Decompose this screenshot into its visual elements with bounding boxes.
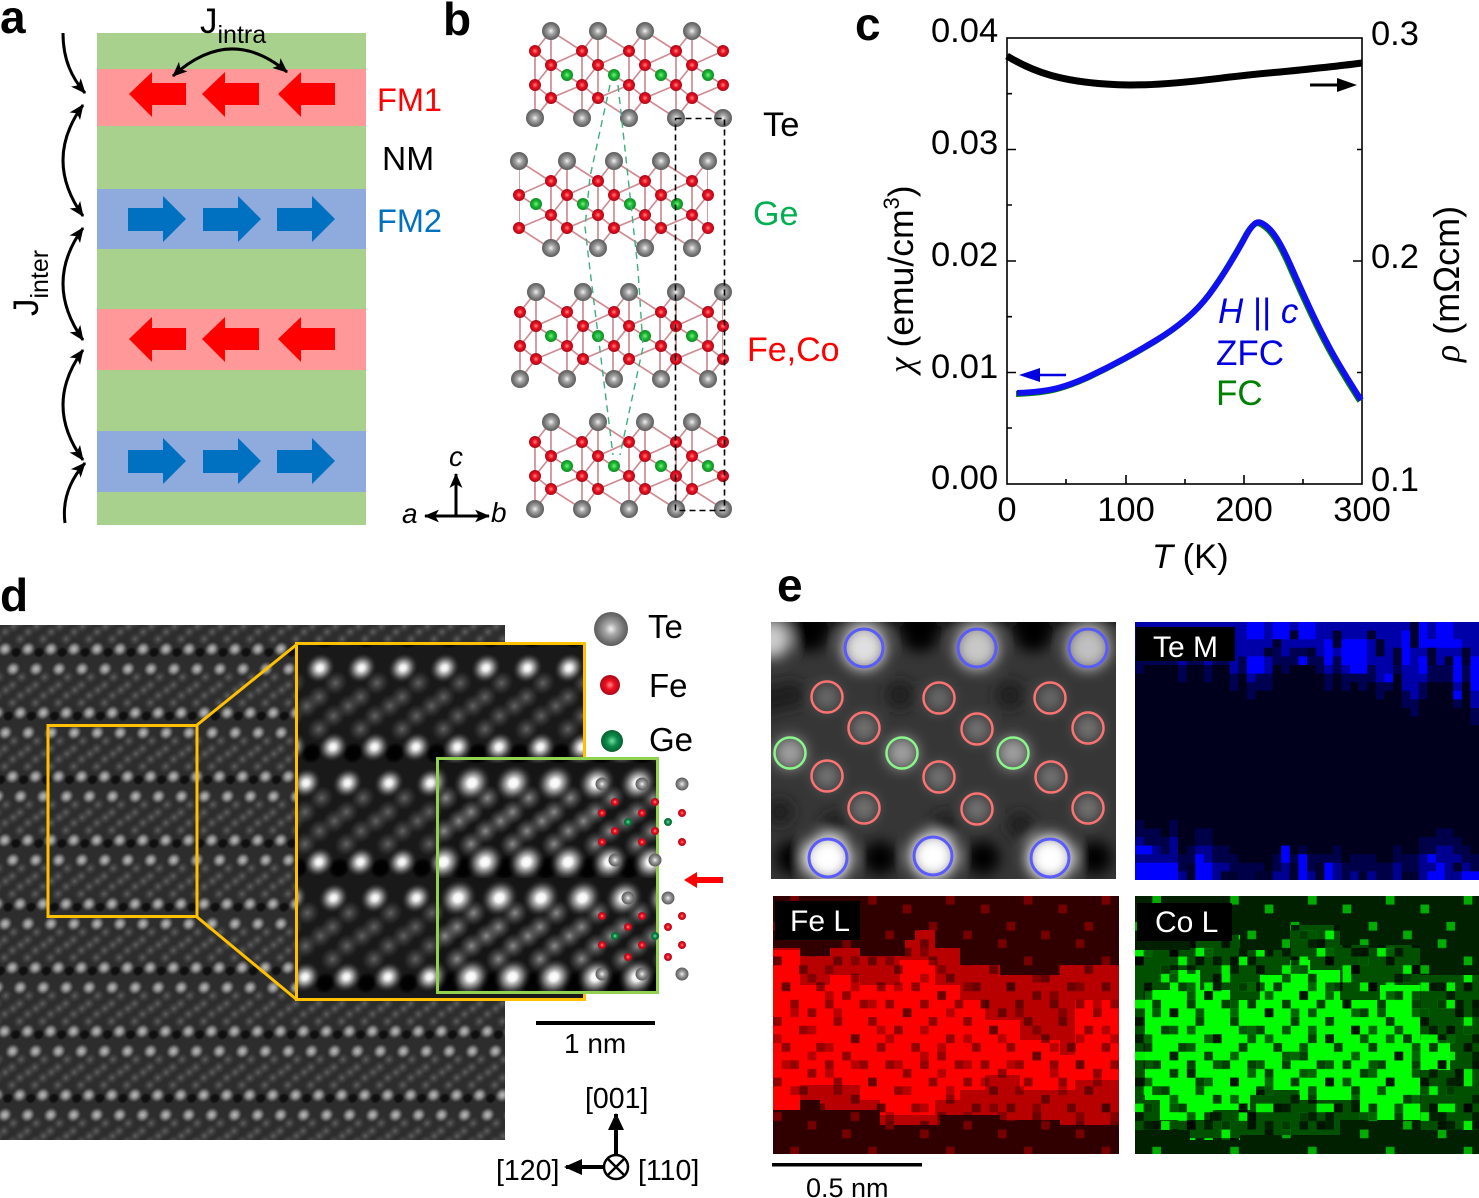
inset atom overlay Fe	[598, 798, 686, 961]
scale bar 0.5 nm	[772, 1163, 922, 1198]
legend: Ge	[649, 721, 693, 758]
Te M map: Te M	[1153, 631, 1218, 664]
yellow selection box and connectors	[48, 645, 296, 999]
zone axis directions: [110]	[638, 1155, 699, 1187]
black arrow pointing to right axis	[1310, 78, 1357, 92]
J inter curved arrows	[63, 33, 85, 523]
panel a: magnetic layer schematic	[0, 0, 442, 525]
green simulated inset	[438, 758, 658, 992]
left axis tick labels: 0.02	[931, 236, 998, 274]
HAADF filtered image with atom circles	[771, 622, 1116, 879]
panel b: crystal structure	[402, 0, 840, 529]
left axis title: 3	[879, 197, 904, 209]
panel d: STEM image	[0, 569, 723, 1187]
J intra label: J	[200, 2, 218, 41]
structure layer 4	[526, 413, 732, 518]
inset atom overlay Ge	[611, 818, 672, 940]
J inter label: J	[7, 298, 46, 316]
FC label: FC	[1216, 374, 1263, 413]
Ge label: Ge	[753, 195, 798, 233]
x axis tick labels: 100	[1097, 491, 1155, 529]
layer stack	[97, 33, 366, 525]
Co L map: Co L	[1155, 906, 1218, 939]
J inter label: inter	[26, 250, 54, 298]
x axis title: T (K)	[1152, 538, 1229, 576]
crystal axes: c	[449, 441, 463, 472]
dashed black unit cell	[676, 118, 724, 510]
left axis tick labels: 0.01	[931, 348, 998, 386]
resistivity curve	[1007, 56, 1362, 85]
zone axis directions	[496, 1083, 699, 1187]
x axis tick labels: 0	[997, 491, 1017, 529]
crystal axes	[402, 441, 507, 529]
blue right spin arrows FM2	[128, 196, 335, 242]
right axis title: ρ (mΩcm)	[1426, 206, 1467, 363]
yellow zoomed inset	[296, 644, 584, 1000]
red left spin arrows lower	[129, 317, 335, 362]
left axis tick labels: 0.04	[931, 12, 998, 50]
left axis tick labels: 0.03	[931, 124, 998, 162]
zone axis directions: [001]	[585, 1083, 648, 1115]
x axis tick labels: 300	[1333, 491, 1391, 529]
blue arrow head	[1019, 368, 1040, 382]
main STEM image	[0, 625, 505, 1140]
legend: Te	[648, 608, 683, 645]
red boundary arrow	[684, 872, 723, 888]
crystal axes: a	[402, 498, 418, 529]
x axis tick labels: 200	[1215, 491, 1273, 529]
left axis title: )	[881, 185, 921, 197]
structure layer 3	[511, 283, 754, 388]
left axis tick labels: 0.00	[931, 459, 998, 497]
inset atom overlay Te	[596, 778, 688, 980]
panel c: susceptibility and resistivity chart	[855, 0, 1467, 576]
H parallel c label: H || c	[1218, 292, 1299, 331]
Fe L map	[773, 896, 1119, 1154]
ZFC label: ZFC	[1216, 334, 1284, 373]
legend: Fe	[649, 667, 688, 704]
label d: d	[0, 569, 28, 621]
left axis tick labels	[931, 12, 998, 497]
Fe,Co label: Fe,Co	[747, 331, 840, 369]
x axis tick labels	[997, 491, 1391, 529]
plot frame and ticks	[1007, 38, 1362, 484]
right axis tick labels: 0.2	[1371, 238, 1419, 276]
Fe L map: Fe L	[790, 905, 850, 938]
dashed green primitive cell	[585, 85, 643, 455]
FM2 label: FM2	[377, 203, 442, 239]
structure layer 2	[510, 152, 717, 257]
FC curve	[1016, 223, 1360, 401]
right axis tick labels: 0.1	[1371, 461, 1419, 499]
label e: e	[777, 559, 803, 611]
ZFC curve	[1017, 222, 1361, 400]
Co L map	[1135, 896, 1479, 1154]
panel e: EELS maps	[754, 559, 1479, 1198]
FM1 label: FM1	[377, 82, 442, 118]
zone axis directions: [120]	[496, 1155, 559, 1187]
NM label: NM	[382, 141, 434, 178]
left axis title: χ (emu/cm	[881, 209, 921, 373]
scale bar 1 nm	[536, 1021, 655, 1059]
structure layer 1	[526, 22, 732, 127]
J intra label: intra	[218, 21, 266, 49]
legend	[594, 608, 693, 758]
blue right spin arrows lower	[128, 438, 335, 484]
scale bar 1 nm: 1 nm	[564, 1028, 626, 1059]
right axis tick labels	[1371, 15, 1419, 499]
Te M map	[1135, 622, 1479, 880]
crystal axes: b	[491, 497, 507, 528]
Te label: Te	[763, 106, 799, 144]
blue arrow pointing to left axis	[1030, 374, 1066, 376]
red left spin arrows FM1	[129, 72, 335, 117]
right axis tick labels: 0.3	[1371, 15, 1419, 53]
J intra arrow	[173, 49, 287, 76]
